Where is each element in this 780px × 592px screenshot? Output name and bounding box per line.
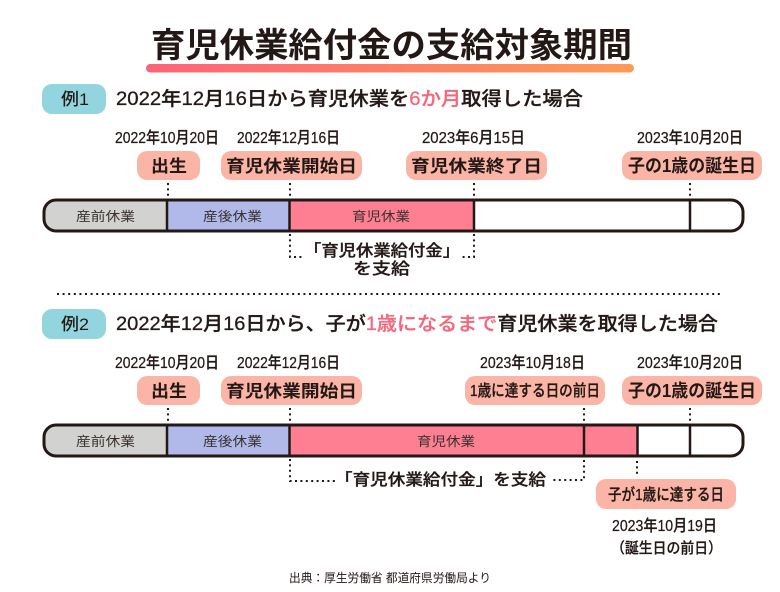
date: leave start: 2022年12月16日 <box>237 354 340 372</box>
badge: example 1 <box>42 84 106 114</box>
timeline bar 2: 産前休業 <box>76 434 135 449</box>
panel: example 1 <box>42 84 762 278</box>
label: birth <box>137 151 200 180</box>
payment note 1 <box>304 242 460 278</box>
badge: example 1: 例1 <box>61 90 89 109</box>
label: first birthday: 子の1歳の誕生日 <box>628 156 756 176</box>
date: day of reaching age 1 <box>611 517 722 557</box>
timeline bar 2: 産後休業 <box>203 434 262 449</box>
payment note 1: 「育児休業給付金」 <box>304 242 460 260</box>
title: 育児休業給付金の支給対象期間 <box>151 27 632 65</box>
date: day of reaching age 1: （誕生日の前日） <box>611 540 722 557</box>
timeline bar 1 <box>44 200 743 231</box>
label: first birthday: 子の1歳の誕生日 <box>628 381 756 401</box>
timeline bar 2 <box>44 425 743 456</box>
date: leave end: 2023年6月15日 <box>422 129 525 147</box>
label: first birthday <box>622 151 762 180</box>
label: day before reaching age 1: 1歳に達する日の前日 <box>470 382 600 400</box>
date: leave start: 2022年12月16日 <box>237 129 340 147</box>
timeline bar 1: 産後休業 <box>203 209 262 224</box>
label: first birthday <box>622 376 762 405</box>
panel: example 2 <box>42 309 762 557</box>
label: birth: 出生 <box>151 157 187 176</box>
heading: example 2: 2022年12月16日から、子が 1歳になるまで 育児休業を取得した場合 <box>116 313 718 335</box>
label: leave end <box>406 151 547 180</box>
label: leave start <box>221 376 362 405</box>
timeline bar 2: 育児休業 <box>417 434 475 449</box>
date: birth: 2022年10月20日 <box>115 129 219 147</box>
heading: example 1: 2022年12月16日から育児休業を 6か月取得した場合 <box>116 88 583 110</box>
timeline bar 1: 育児休業 <box>352 209 410 224</box>
badge: example 2 <box>42 309 106 339</box>
date: first birthday: 2023年10月20日 <box>637 354 743 372</box>
label: birth: 出生 <box>151 382 187 401</box>
payment note 1: を支給 <box>353 260 410 278</box>
title underline <box>146 64 634 72</box>
date: day of reaching age 1: 2023年10月19日 <box>612 517 717 535</box>
label: leave start: 育児休業開始日 <box>226 382 357 401</box>
timeline bar 1: 産前休業 <box>76 209 135 224</box>
badge: example 2: 例2 <box>61 315 89 334</box>
source note: 出典：厚生労働省 都道府県労働局より <box>289 571 491 585</box>
date: day before reaching age 1: 2023年10月18日 <box>480 354 585 372</box>
label: leave start: 育児休業開始日 <box>226 157 357 176</box>
date: birth: 2022年10月20日 <box>115 354 219 372</box>
label: leave end: 育児休業終了日 <box>411 157 542 176</box>
label: day of reaching age 1: 子が1歳に達する日 <box>608 485 724 504</box>
label: day before reaching age 1 <box>465 376 605 405</box>
date: first birthday: 2023年10月20日 <box>637 129 743 147</box>
label: leave start <box>221 151 362 180</box>
label: birth <box>137 376 200 405</box>
label: day of reaching age 1 <box>596 479 736 509</box>
payment note 2: 「育児休業給付金」を支給 <box>335 471 546 489</box>
